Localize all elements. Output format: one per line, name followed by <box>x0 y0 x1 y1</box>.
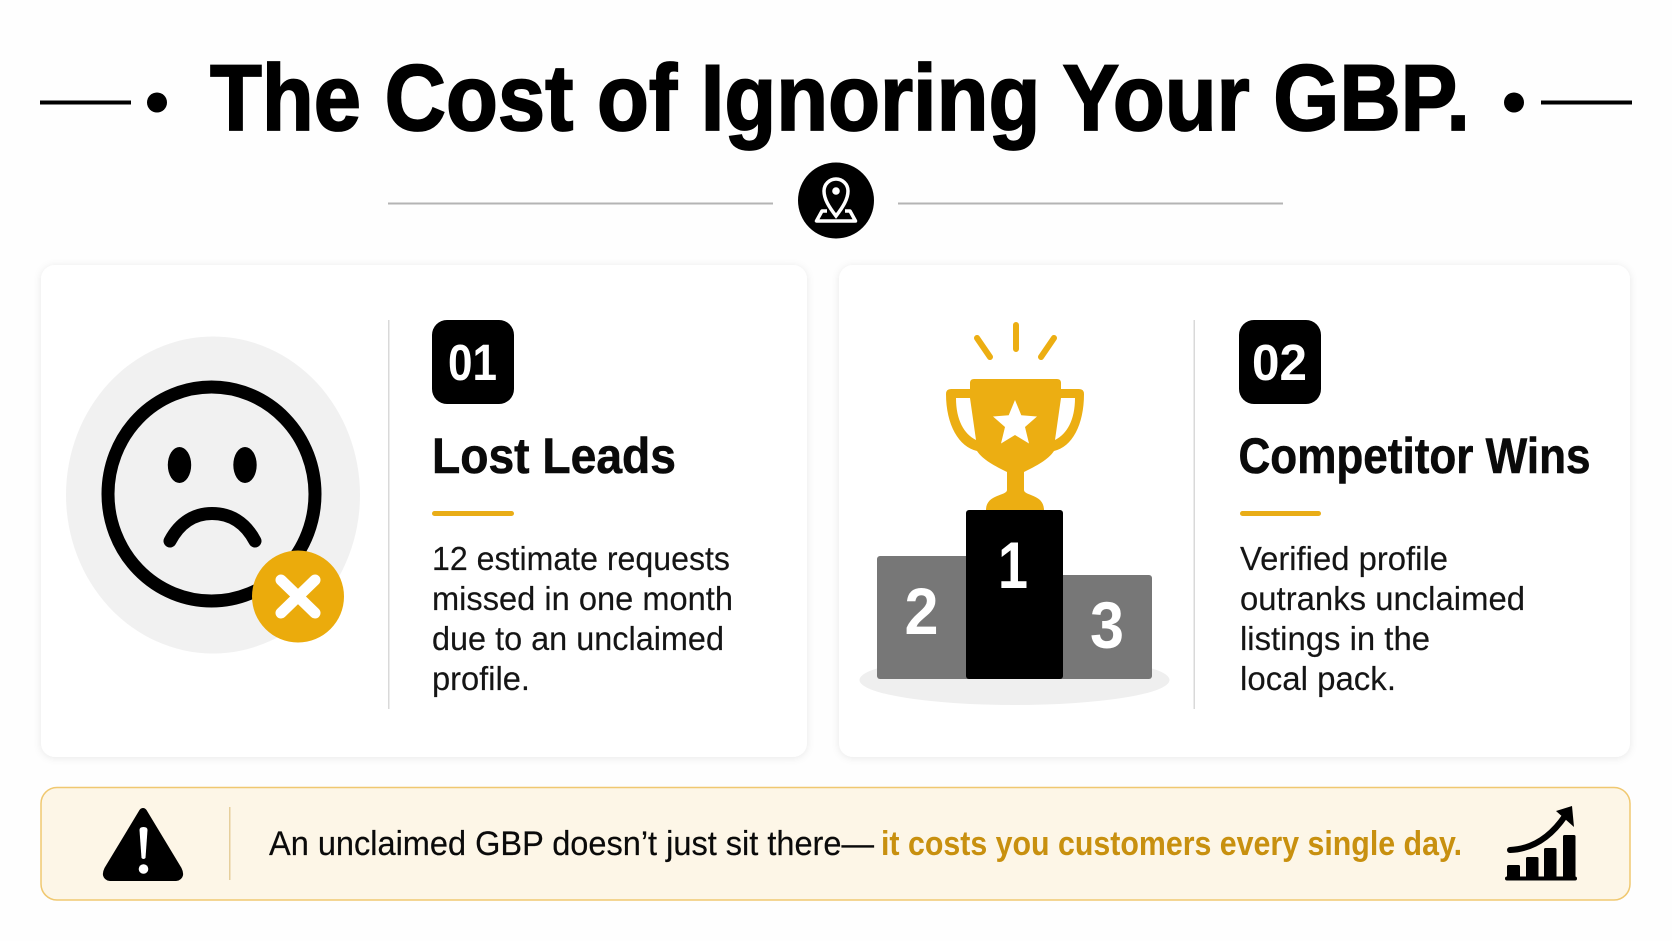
body text: Verified profile <box>1240 540 1448 577</box>
icon: sad face with x badge <box>66 336 360 654</box>
body text: 12 estimate requests <box>432 540 730 577</box>
icon: rising bar chart <box>1505 806 1577 880</box>
number badge 02: 02 <box>1252 334 1307 391</box>
body text: due to an unclaimed <box>432 620 724 657</box>
number badge 02 <box>1239 320 1321 404</box>
card background <box>839 265 1630 757</box>
icon: podium with trophy: 1 <box>998 528 1028 602</box>
body text <box>1240 540 1525 697</box>
panel: lost leads <box>41 265 807 757</box>
callout background <box>41 788 1630 900</box>
body text <box>432 540 733 697</box>
callout text: An unclaimed GBP doesn’t just sit there— <box>269 825 874 863</box>
body text: listings in the <box>1240 620 1430 657</box>
callout highlight text: it costs you customers every single day. <box>881 825 1462 863</box>
body text: profile. <box>432 660 530 697</box>
body text: outranks unclaimed <box>1240 580 1525 617</box>
body text: missed in one month <box>432 580 733 617</box>
card background <box>41 265 807 757</box>
header ornament: left line and dot <box>40 92 167 112</box>
number badge 01: 01 <box>448 334 497 391</box>
header ornament: right dot and line <box>1504 92 1632 112</box>
heading: competitor wins: Competitor Wins <box>1238 428 1590 484</box>
body text: local pack. <box>1240 660 1396 697</box>
icon: map pin in black circle <box>798 162 874 238</box>
callout bar <box>41 788 1630 900</box>
icon: warning triangle <box>107 812 179 877</box>
number badge 01 <box>432 320 514 404</box>
icon: podium with trophy: 3 <box>1090 588 1124 662</box>
icon: podium with trophy: 2 <box>904 574 938 648</box>
panel: competitor wins <box>839 265 1630 757</box>
title: The Cost of Ignoring Your GBP. <box>210 45 1470 150</box>
heading: lost leads: Lost Leads <box>432 428 676 484</box>
trophy <box>946 325 1084 510</box>
icon: podium with trophy <box>860 325 1170 705</box>
